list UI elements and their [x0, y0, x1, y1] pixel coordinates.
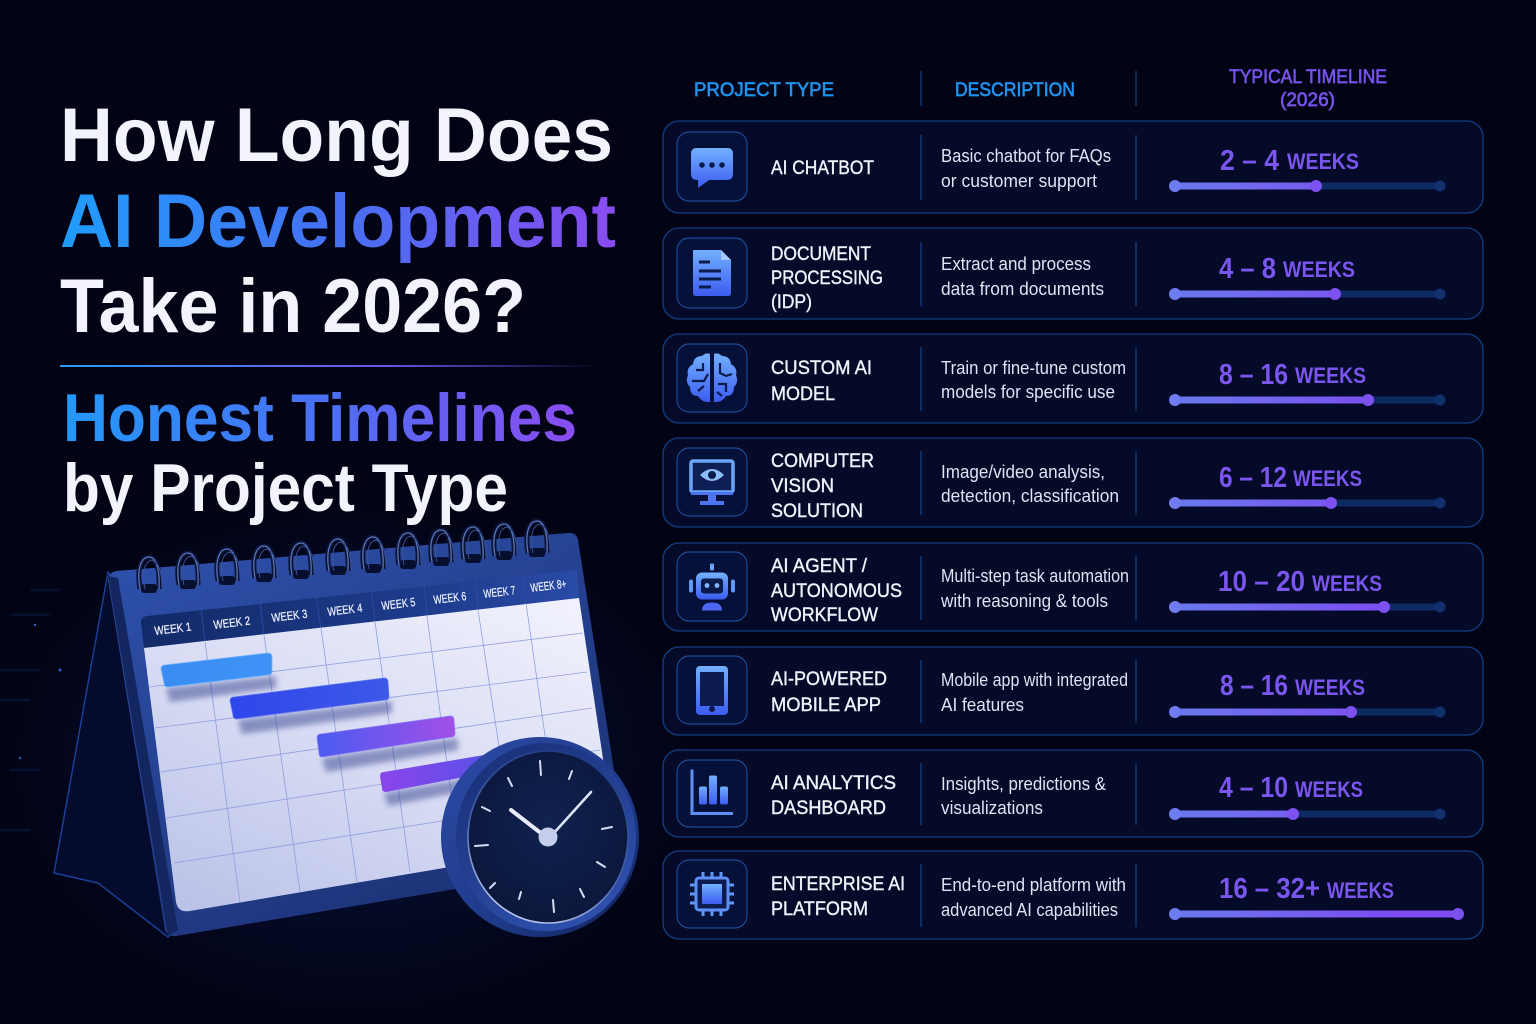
calendar stand [54, 572, 200, 937]
row: AI chatbot [663, 121, 1483, 213]
row: mobile app: AI-POWERED [771, 668, 887, 690]
row: document processing: Extract and process [941, 254, 1091, 274]
row: custom AI model [663, 334, 1483, 423]
row: AI agent: WORKFLOW [771, 604, 879, 626]
week labels: WEEK 6 [433, 589, 467, 607]
row: analytics dashboard: DASHBOARD [771, 797, 886, 819]
week labels: WEEK 1 [154, 620, 192, 638]
row: AI chatbot: AI CHATBOT [771, 157, 874, 179]
row: computer vision: SOLUTION [771, 500, 863, 522]
row: AI agent: with reasoning & tools [940, 591, 1108, 611]
table header: PROJECT TYPE [694, 80, 834, 101]
calendar grid [149, 603, 608, 903]
row: analytics dashboard: WEEKS [1295, 777, 1363, 802]
row: document processing [663, 228, 1483, 319]
subtitle: by Project Type [63, 450, 508, 526]
row: analytics dashboard: Insights, predictions & [941, 774, 1106, 794]
row: computer vision: VISION [771, 475, 834, 497]
row: AI chatbot: Basic chatbot for FAQs [941, 146, 1111, 166]
icon: brain [687, 353, 737, 402]
row: analytics dashboard: 4 – 10 [1219, 772, 1288, 804]
week labels: WEEK 3 [271, 607, 308, 625]
row: mobile app: WEEKS [1295, 675, 1365, 700]
table header: (2026) [1280, 90, 1335, 111]
icon: chat bubble [691, 148, 733, 188]
row: custom AI model: 8 – 16 [1219, 359, 1288, 391]
row: enterprise platform: advanced AI capabilities [941, 900, 1118, 920]
title [60, 93, 616, 349]
title: How Long Does [60, 93, 613, 178]
row: computer vision: COMPUTER [771, 450, 874, 472]
row: custom AI model: MODEL [771, 383, 835, 405]
timeline bar [1169, 180, 1446, 192]
row: enterprise platform: End-to-end platform with [941, 875, 1126, 895]
gantt bars [161, 653, 490, 806]
row: AI agent: WEEKS [1312, 571, 1382, 596]
row: AI agent: AUTONOMOUS [771, 580, 902, 602]
row: AI chatbot: 2 – 4 [1220, 145, 1279, 177]
row: AI chatbot: WEEKS [1287, 149, 1359, 174]
row: mobile app: MOBILE APP [771, 694, 881, 716]
title divider [60, 365, 600, 367]
illustration: desk calendar [54, 521, 628, 937]
row: AI agent: 10 – 20 [1218, 566, 1305, 598]
row: custom AI model: WEEKS [1295, 363, 1366, 388]
timeline bar [1169, 601, 1446, 613]
clock face [468, 751, 628, 923]
row: document processing: WEEKS [1283, 257, 1355, 282]
row: mobile app: 8 – 16 [1220, 670, 1288, 702]
clock rim [441, 737, 639, 937]
row: custom AI model: models for specific use [941, 382, 1115, 402]
illustration: clock [441, 737, 639, 937]
timeline bar [1169, 394, 1446, 406]
timeline bar [1169, 288, 1446, 300]
row: AI chatbot: or customer support [941, 171, 1097, 191]
row: computer vision: 6 – 12 [1219, 462, 1287, 494]
row: document processing: data from documents [941, 279, 1104, 299]
week labels: WEEK 4 [327, 601, 363, 619]
week labels [154, 577, 567, 638]
clock hub [538, 828, 558, 846]
week labels: WEEK 7 [483, 583, 516, 601]
row: document processing: PROCESSING [771, 267, 883, 289]
row: document processing: 4 – 8 [1219, 253, 1276, 285]
icon: document [693, 250, 731, 296]
row: mobile app: AI features [941, 695, 1024, 715]
calendar sheet [144, 598, 615, 911]
subtitle [63, 380, 577, 526]
table header: TYPICAL TIMELINE [1229, 67, 1387, 88]
clock hands [511, 810, 542, 834]
row: document processing: (IDP) [771, 291, 812, 313]
week labels: WEEK 2 [213, 614, 251, 632]
row: computer vision [663, 438, 1483, 527]
timeline bar [1169, 908, 1464, 920]
row: analytics dashboard: visualizations [941, 798, 1043, 818]
row: computer vision: WEEKS [1293, 466, 1362, 491]
header separators [201, 574, 526, 642]
week labels: WEEK 8+ [530, 577, 567, 595]
row: enterprise platform [663, 851, 1483, 939]
row: AI agent: Multi-step task automation [941, 566, 1129, 586]
title: AI Development [60, 179, 616, 264]
calendar board [108, 533, 628, 936]
timeline bar [1169, 497, 1446, 509]
row: enterprise platform: ENTERPRISE AI [771, 873, 905, 895]
spiral rings [139, 521, 550, 593]
icon: chip [690, 872, 734, 916]
row: computer vision: Image/video analysis, [941, 462, 1105, 482]
timeline bar [1169, 808, 1446, 820]
clock ticks [475, 761, 612, 912]
subtitle: Honest Timelines [63, 380, 577, 456]
row: AI agent: AI AGENT / [771, 555, 868, 577]
table header: DESCRIPTION [955, 80, 1075, 101]
icon: monitor with eye [691, 461, 733, 505]
timeline bar [1169, 706, 1446, 718]
week labels: WEEK 5 [381, 595, 416, 613]
title: Take in 2026? [60, 264, 526, 349]
row: enterprise platform: PLATFORM [771, 898, 868, 920]
row: enterprise platform: WEEKS [1327, 878, 1394, 903]
row: mobile app [663, 647, 1483, 735]
row: custom AI model: Train or fine-tune custom [941, 358, 1126, 378]
icon: robot [689, 564, 735, 610]
row: AI agent [663, 543, 1483, 631]
week header band [141, 570, 579, 648]
icon: bar chart [692, 770, 733, 814]
row: analytics dashboard [663, 750, 1483, 837]
row: document processing: DOCUMENT [771, 243, 871, 265]
row: custom AI model: CUSTOM AI [771, 357, 872, 379]
row: analytics dashboard: AI ANALYTICS [771, 772, 896, 794]
row: mobile app: Mobile app with integrated [941, 670, 1128, 690]
table header [694, 67, 1387, 111]
icon: tablet [696, 666, 728, 715]
row: computer vision: detection, classification [941, 486, 1119, 506]
row: enterprise platform: 16 – 32+ [1219, 873, 1320, 905]
calendar front edge [108, 576, 178, 936]
